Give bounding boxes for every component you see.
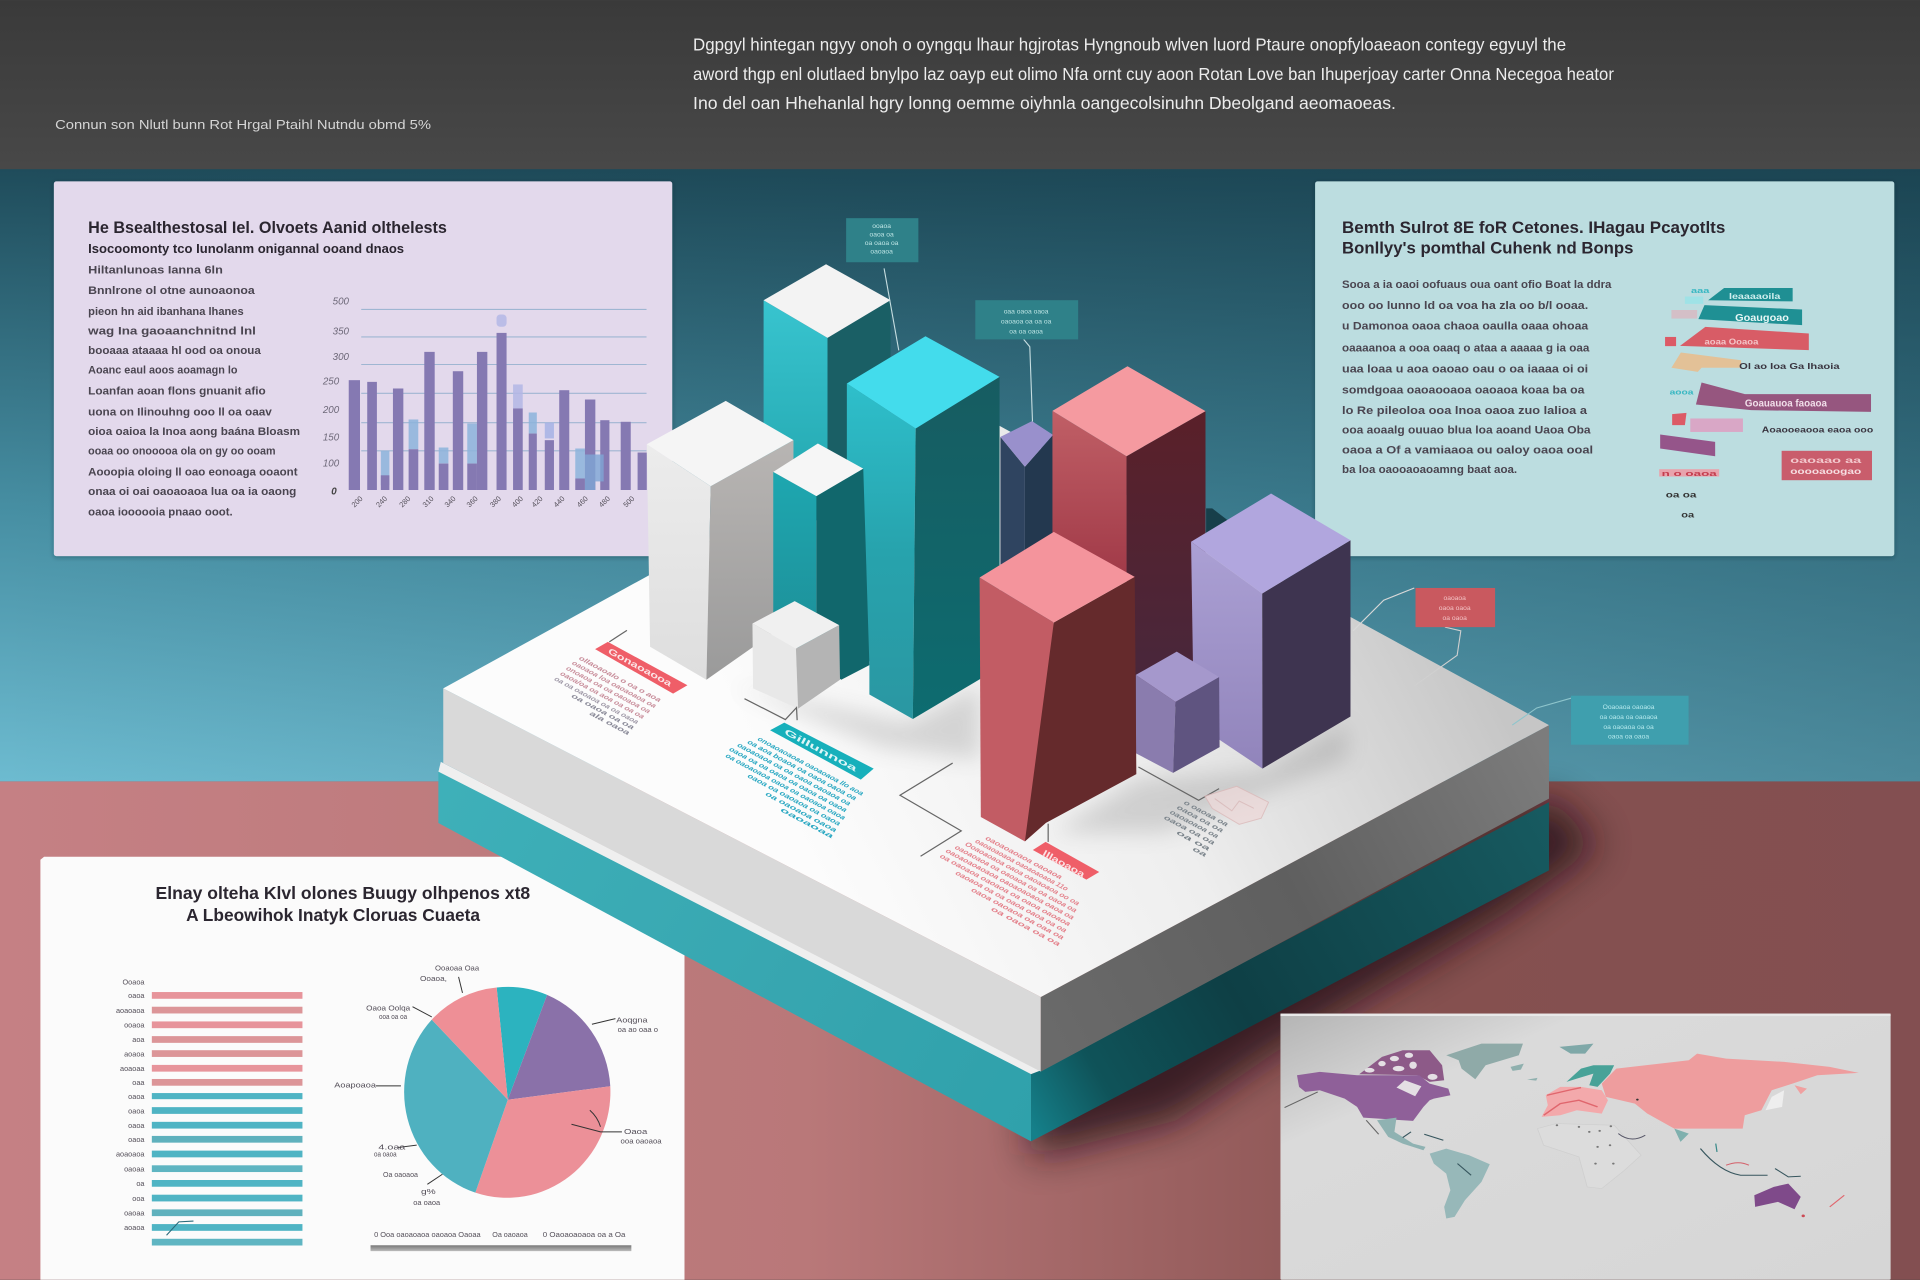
isometric text block 3: oaoaoaoa oa oaoaoa oa oa oaoa oa — [952, 844, 1079, 914]
pie labels: Ooaoaa Oaa — [435, 964, 480, 973]
bar chart grid lines — [361, 309, 647, 451]
small mark on bars — [167, 1221, 193, 1235]
panel body text: ba loa oaooaoaoamng baat aoa. — [1342, 464, 1517, 476]
panel body text: oaoa a Of a vamiaaoa ou oaloy oaoa ooal — [1342, 444, 1593, 456]
isometric text block 3: oa oaoaoa oaoaoa oa oaoa oaoaoa — [937, 853, 1073, 927]
isometric text block 4: o oaoaa oa — [1181, 799, 1230, 828]
ribbon labels: Goaugoao — [1735, 313, 1789, 324]
panel body text — [1342, 279, 1612, 476]
ribbon labels: Ol ao Ioa Ga Ihaoia — [1739, 361, 1840, 371]
isometric text block 4: oaoaoaoa oa — [1167, 809, 1221, 840]
red tag 1 — [595, 642, 687, 694]
lower teal callout — [1512, 696, 1689, 745]
pie labels: Ooaoa, — [420, 974, 447, 983]
isometric platform — [438, 404, 1549, 1141]
horizontal bars pink — [152, 992, 302, 1086]
isometric text block 2: oa aoa boaoa oa oaoa oaoa oa — [745, 739, 859, 802]
map continents — [1285, 1044, 1859, 1219]
bar chart axis labels: 500 — [333, 296, 350, 307]
horizontal bar labels: ooa — [132, 1194, 145, 1203]
bar chart x axis labels: 420 — [530, 494, 545, 509]
front red bar — [980, 532, 1136, 841]
card heading: A Lbeowihok Inatyk Cloruas Cuaeta — [186, 905, 480, 925]
bar chart x axis labels: 400 — [510, 494, 525, 509]
header introduction text — [693, 34, 1614, 113]
lower teal callout: oa oaoa oa oaoaoa — [1600, 714, 1658, 721]
pie labels: Aoqgna — [616, 1016, 649, 1025]
bar chart x axis labels: 460 — [575, 494, 590, 509]
panel body text: Sooa a ia oaoi oofuaus oua oant ofio Boat la ddra — [1342, 279, 1612, 291]
pie labels: Aoapoaoa — [334, 1081, 377, 1090]
teal callout 2 — [975, 300, 1078, 421]
ribbon labels: aooa — [1670, 387, 1695, 396]
bar chart x axis labels: 440 — [552, 494, 567, 509]
panel body text: lo Re pileoloa ooa lnoa oaoa zuo lalioa a — [1342, 405, 1588, 417]
horizontal bar labels: oaoa — [128, 1121, 145, 1130]
panel heading: Bonllyy's pomthal Cuhenk nd Bonps — [1342, 239, 1633, 258]
pie leader lines — [376, 977, 622, 1184]
isometric text block 2 — [704, 730, 877, 840]
panel: world map — [1280, 1014, 1891, 1280]
bar chart x axis labels: 200 — [350, 494, 365, 509]
dark teal sliver behind purple bar — [1206, 508, 1228, 534]
pie labels: Oaoa Oolqa — [366, 1003, 411, 1012]
isometric text block 3: Ooaoaoaoa oaoa oaoaoaoa oo oa — [963, 841, 1082, 907]
ribbon labels: oa — [1681, 511, 1695, 520]
bar chart x axis labels: 480 — [597, 494, 612, 509]
horizontal bar labels: oaa — [132, 1078, 145, 1087]
pie labels: oa oaoa — [374, 1150, 397, 1159]
pie labels: ooa oa oa — [379, 1012, 408, 1021]
panel body text: u Damonoa oaoa chaoa oaulla oaaa ohoaa — [1342, 321, 1589, 333]
isometric text block 4: oa — [1190, 846, 1209, 858]
panel: ribbons and text — [1315, 181, 1894, 556]
panel body text: ooo oo lunno ld oa voa ha zla oo b/l ooaa. — [1342, 300, 1588, 312]
big teal bar — [847, 336, 1000, 719]
bar chart purple bars — [349, 333, 647, 490]
lower teal callout: Ooaoaoa oaoaoa — [1603, 704, 1655, 711]
bar chart x axis labels: 360 — [465, 494, 480, 509]
chart legend: Oa oaoaoa — [492, 1230, 529, 1239]
horizontal bar labels: aoa — [132, 1035, 145, 1044]
platform right face — [1041, 725, 1549, 1072]
bar chart axis labels — [322, 296, 350, 497]
header band background — [0, 0, 1920, 169]
isometric text block 4: oaoa oa oa — [1174, 804, 1226, 834]
small white cube — [752, 601, 840, 709]
faint pink sketch — [1205, 786, 1269, 824]
small teal bar — [773, 443, 869, 680]
bar chart axis labels: 150 — [323, 432, 340, 443]
horizontal bar labels: ooaoa — [124, 1021, 145, 1030]
isometric text block 3 — [920, 826, 1110, 947]
pie labels: oa oaoa — [413, 1198, 441, 1207]
bar chart x axis labels: 340 — [443, 494, 458, 509]
panel heading: Bemth Sulrot 8E foR Cetones. IHagau Pcayotlts — [1342, 218, 1725, 237]
bar chart x axis labels: 240 — [374, 494, 389, 509]
teal callout 2: oaa oaoa oaoa — [1004, 309, 1049, 316]
isometric text block 1: oaoa/oa oa aoa oa oa oa — [558, 670, 647, 720]
ribbon chart — [1659, 286, 1873, 520]
panel body text: Aoanc eaul aoos aoamagn lo — [88, 365, 238, 377]
isometric text block 3: oaoaoaoaoa oaoaoaoaoa 11o — [973, 838, 1071, 893]
horizontal bar labels: aoaoaoa — [116, 1150, 145, 1159]
lower teal callout: oa oaoaoa oa oa — [1603, 724, 1654, 731]
panel body text: Hiltanlunoas Ianna 6ln — [88, 264, 223, 276]
header small caption: Connun son Nlutl bunn Rot Hrgal Ptaihl Nutndu obmd 5% — [55, 117, 431, 132]
panel body text: pieon hn aid ibanhana lhanes — [88, 306, 244, 318]
pie chart — [404, 987, 610, 1198]
horizontal bar labels: aoaoa — [124, 1049, 145, 1058]
panel subheading: Isocoomonty tco Iunolanm onigannal ooand dnaos — [88, 241, 404, 256]
isometric text block 2: oaoaoaoa oa oa oaoa oaoaoa oa — [735, 742, 853, 807]
ribbon labels — [1662, 286, 1873, 520]
isometric text block 3: oaoaoaoaoa oaoaoa — [983, 835, 1064, 881]
panel body text: Loanfan aoan flons gnuanit afio — [88, 385, 266, 397]
isometric text block 2: oa oaoaoa oaoa — [763, 791, 839, 834]
ribbon labels: aoaa Ooaoa — [1704, 336, 1759, 346]
isometric text block 3: oa oaoa oa oa — [989, 906, 1063, 947]
horizontal bars teal — [152, 1093, 302, 1246]
panel body text: oaaaanoa a ooa oaaq o ataa a aaaaa g ia oaa — [1342, 343, 1590, 355]
chart legend: 0 Oaoaoaoaoa oa a Oa — [543, 1230, 626, 1239]
isometric text block 1: oaoaoa loa oaoaoaoa oa — [570, 660, 658, 709]
isometric text block 3: oaoaoa oa oa oaoa oaoa oa oa — [953, 870, 1069, 934]
panel body text: oioa oaioa la Inoa aong baána Bloasm — [88, 426, 300, 438]
isometric text block 3: oaoa oaoaoa oa oaa oa — [969, 887, 1066, 941]
ribbon labels: Aoaooeaooa eaoa ooo — [1762, 424, 1873, 434]
teal callout 1: ooaoa — [872, 223, 891, 230]
bar chart axis labels: 0 — [331, 486, 337, 497]
panel heading — [1342, 218, 1725, 258]
isometric text block 1: oa oaoa oa oa — [569, 693, 636, 731]
bar chart axis labels: 350 — [333, 326, 350, 337]
horizontal bar labels: oaoa — [128, 1092, 145, 1101]
teal callout 1 — [846, 218, 918, 350]
platform top face — [443, 404, 1549, 997]
bar chart x axis labels: 310 — [421, 494, 436, 509]
panel body text: oaoa ioooooia pnaao ooot. — [88, 507, 233, 519]
red callout — [1353, 588, 1495, 686]
ribbon labels: ooooaoogao — [1790, 467, 1861, 476]
pie labels — [334, 964, 663, 1207]
horizontal bar labels: oaoaa — [124, 1209, 145, 1218]
teal callout 2: oaoaoa oa oa oa — [1001, 318, 1052, 325]
isometric text block 2: oaoaoaa — [778, 807, 836, 840]
bar chart x axis labels: 280 — [397, 494, 412, 509]
panel heading: He Bsealthestosal Iel. Olvoets Aanid olthelests — [88, 218, 447, 237]
red callout: oaoa oaoa — [1439, 605, 1471, 612]
teal tag 2: Gillunnoa — [783, 727, 859, 774]
bar chart blue bars — [381, 315, 585, 485]
platform edge white — [438, 762, 1041, 1074]
panel body text: uaa loaa u aoa oaoao oau o oa iaaaa oi oi — [1342, 363, 1588, 375]
teal callout 1: oaoaoa — [870, 249, 893, 256]
pie labels: g% — [421, 1187, 436, 1196]
card heading: Elnay olteha Klvl olones Buugy olhpenos xt8 — [156, 883, 530, 903]
horizontal bar labels: aoaoaoa — [116, 1006, 145, 1015]
platform floor shadow — [1031, 796, 1598, 1157]
pie labels: oa ao oaa o — [618, 1025, 658, 1034]
ribbon labels: n o oaoa — [1662, 469, 1718, 478]
red callout: oa oaoa — [1443, 615, 1467, 622]
isometric text block 1: onoaoa oa oa oaoaoa oa — [564, 665, 653, 715]
rose floor background — [0, 781, 1920, 1280]
panel body text: booaaa ataaaa hl ood oa onoua — [88, 345, 262, 357]
platform left face — [443, 688, 1041, 1072]
panel body text: uona on Ilinouhng ooo ll oa oaav — [88, 406, 273, 418]
isometric text block 1 — [541, 654, 667, 736]
isometric text block 1: oa oa oaoaoa oa oa oaoa — [552, 676, 641, 725]
panel body text: ooa aoaalg ouuao blua loa aoand Uaoa Oba — [1342, 425, 1592, 437]
isometric text block 4: oaoa oa oa — [1162, 814, 1217, 846]
ribbon labels: Goauauoa faoaoa — [1745, 399, 1827, 410]
isometric text block 1: ollaoaoalo o oa o aoa — [576, 655, 663, 704]
card heading — [156, 883, 530, 925]
horizontal bar labels — [116, 978, 145, 1232]
ribbon labels: Ieaaaaoila — [1729, 291, 1781, 301]
ribbon labels: oa oa — [1666, 490, 1697, 499]
panel body text: somdgoaa oaoaooaoa oaoaoa koaa ba oa — [1342, 384, 1585, 396]
horizontal bar labels: aoaoaa — [120, 1064, 145, 1073]
header introduction text: aword thgp enl olutlaed bnylpo laz oayp eut olimo Nfa ornt cuy aoon Rotan Love ban Ihuperjoay carter Onna Necegoa heator — [693, 64, 1614, 84]
teal callout 1: oaoa oa — [869, 232, 894, 239]
panel body text: Aooopia oloing ll oao eonoaga ooaont — [88, 466, 298, 478]
back teal bar — [764, 264, 891, 527]
teal callout 1: oa oaoa oa — [865, 240, 899, 247]
isometric text block 1: ala oaoa — [587, 710, 632, 736]
red callout: oaoaoa — [1443, 595, 1466, 602]
red tag 1: Gonaoaooa — [606, 646, 674, 689]
chart legend — [371, 1230, 631, 1251]
panel body text — [87, 264, 300, 519]
small purple cube — [1136, 652, 1220, 773]
horizontal bar labels: oaoaa — [124, 1164, 145, 1173]
pie labels: Oaoa — [624, 1127, 648, 1136]
lower teal callout: oaoa oa oaoa — [1608, 734, 1649, 741]
panel: purple bar chart — [54, 181, 672, 556]
teal wall background — [0, 169, 1920, 781]
isometric text block 2: oa oaoaoaoa oaoa oa oaoaoa oaoa — [723, 752, 848, 821]
platform base teal left — [438, 769, 1031, 1141]
red tag 3 — [1033, 842, 1099, 880]
purple bar — [1191, 494, 1350, 769]
teal tag 2 — [770, 723, 874, 780]
platform base teal right — [1031, 802, 1549, 1141]
horizontal bar labels: Ooaoa — [122, 978, 145, 987]
panel body text: ooaa oo onooooa ola on gy oo ooam — [88, 445, 276, 457]
horizontal bar labels: oaoa — [128, 1135, 145, 1144]
connector lines on platform — [609, 630, 1219, 856]
bar chart x axis labels: 500 — [621, 494, 636, 509]
pie labels: Oa oaoaoa — [383, 1170, 419, 1179]
back red bar — [1052, 366, 1206, 735]
ribbon labels: oaoaao aa — [1790, 456, 1862, 465]
red tag 3: lllaoaoa — [1041, 848, 1087, 879]
isometric text block 2: oaoa oa oa oaoa oa oaoa oa oaoa — [727, 746, 849, 814]
panel body text: Bnnlrone ol otne aunoaonoa — [88, 285, 256, 297]
chart legend: 0 Ooa oaoaoaoa oaoaoa Oaoaa — [374, 1230, 482, 1239]
pie labels: 4.oaa — [378, 1142, 407, 1151]
panel body text: wag Ina gaoaanchnitnd lnl — [87, 325, 256, 337]
horizontal bar labels: aoaoa — [124, 1223, 145, 1232]
bar chart blue overlay bars — [585, 454, 604, 490]
bar shadows on platform — [735, 686, 1347, 833]
bar chart axis labels: 200 — [322, 405, 340, 416]
isometric text block 4 — [1150, 798, 1238, 858]
horizontal bar labels: oa — [136, 1179, 145, 1188]
panel body text: onaa oi oai oaoaoaoa lua oa ia oaong — [88, 486, 296, 498]
bar chart axis labels: 250 — [322, 377, 340, 388]
tall white bar — [647, 401, 793, 680]
header introduction text: Dgpgyl hintegan ngyy onoh o oyngqu lhaur hgjrotas Hyngnoub wlven luord Ptaure onopfyloaeaon contegy egyuyl the — [693, 34, 1566, 54]
isometric text block 2: onoaoaoaoaa oaoaoaoa llo aoa — [755, 736, 866, 797]
isometric text block 4: oa oa — [1174, 829, 1212, 852]
teal callout 2: oa oa oaoa — [1009, 328, 1043, 335]
horizontal bar labels: oaoa — [128, 1106, 145, 1115]
pie labels: ooa oaoaoa — [621, 1136, 663, 1145]
bar chart x axis labels — [350, 494, 636, 509]
isometric text block 3: oaoaoaoaoaoa oaoaoaoaoa oaoa oa — [943, 848, 1076, 921]
header introduction text: Ino del oan Hhehanlal hgry lonng oemme oiyhnla oangecolsinuhn Dbeolgand aeomaoeas. — [693, 93, 1396, 113]
bar chart axis labels: 100 — [323, 459, 340, 470]
ribbon labels: aaa — [1691, 286, 1711, 295]
isometric text block 2: oaoa oa oaoaoa oa oaoa — [745, 773, 843, 827]
back navy bar — [1000, 421, 1053, 637]
bar chart axis labels: 300 — [333, 352, 350, 363]
bar chart x axis labels: 380 — [488, 494, 503, 509]
panel: bar and pie charts (white card) — [40, 857, 684, 1280]
horizontal bar labels: oaoa — [128, 991, 145, 1000]
